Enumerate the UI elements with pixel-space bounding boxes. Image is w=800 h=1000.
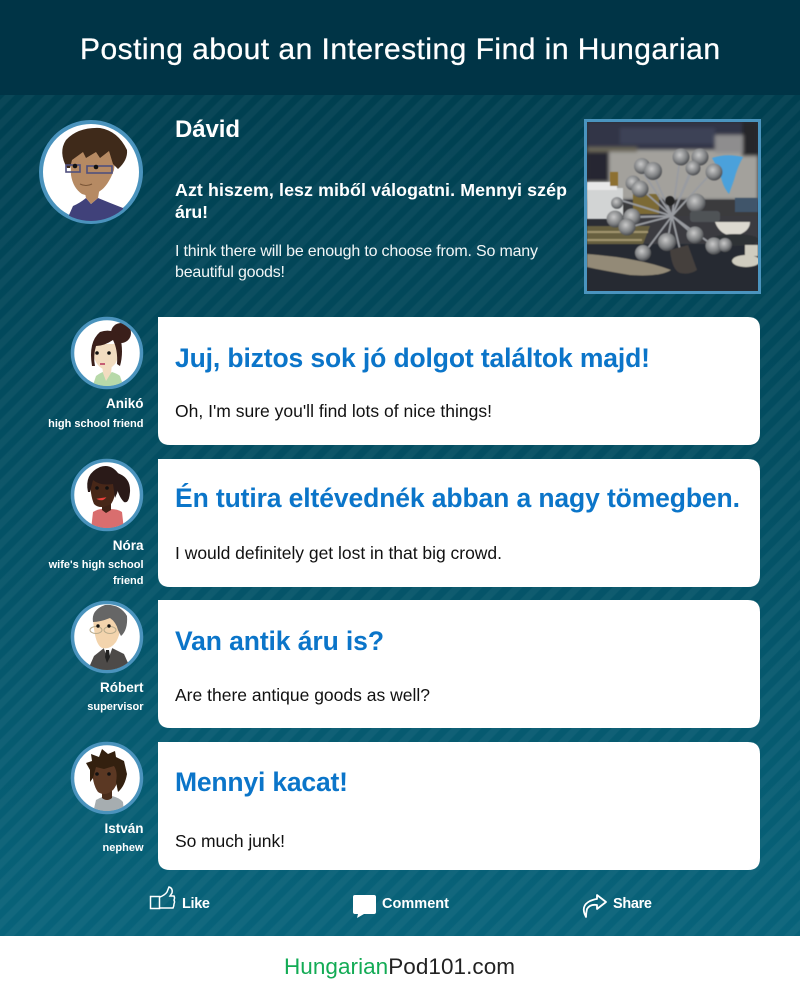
panel: István comment [72, 742, 760, 870]
title: Posting about an Interesting Find in Hungarian [80, 33, 720, 66]
poster translation [175, 243, 538, 281]
poster translation: I think there will be enough to choose from. So many [175, 243, 538, 260]
poster post in Hungarian: áru! [175, 202, 208, 222]
icon: speech bubble [353, 895, 376, 918]
comment in Hungarian: Van antik áru is? [175, 626, 384, 656]
header band [0, 0, 800, 95]
photo: flea market goods [586, 120, 760, 292]
blurred street background [587, 122, 758, 200]
comment translation: I would definitely get lost in that big crowd. [175, 543, 502, 563]
commenter name: Nóra [113, 538, 144, 553]
poster post in Hungarian: Azt hiszem, lesz miből válogatni. Mennyi szép [175, 180, 567, 200]
footer band [0, 936, 800, 1000]
commenter relation: friend [113, 575, 144, 587]
comment card [158, 600, 760, 728]
logo: HungarianPod101.com: HungarianPod101.com [284, 954, 515, 979]
label: Comment [382, 896, 449, 912]
poster name: Dávid [175, 116, 240, 143]
panel: Anikó comment [48, 317, 760, 445]
comment card [158, 317, 760, 445]
icon: share arrow [584, 895, 606, 917]
comment button [353, 895, 449, 918]
icon: thumbs up [150, 887, 174, 908]
commenter relation: wife's high school [48, 559, 144, 571]
comment translation: So much junk! [175, 831, 285, 851]
panel: Nóra comment [48, 459, 760, 587]
comment translation: Oh, I'm sure you'll find lots of nice things! [175, 401, 492, 421]
comment in Hungarian: Juj, biztos sok jó dolgot találtok majd! [175, 343, 650, 373]
poster post in Hungarian [175, 180, 567, 222]
commenter name: Róbert [100, 680, 144, 695]
commenter relation: high school friend [48, 418, 144, 430]
commenter name: István [104, 821, 144, 836]
comment in Hungarian: Én tutira eltévednék abban a nagy tömegben. [175, 483, 740, 513]
comment in Hungarian: Mennyi kacat! [175, 767, 348, 797]
avatar: Nóra [72, 460, 142, 530]
like button [150, 887, 210, 912]
comment card [158, 742, 760, 870]
avatar: István [72, 744, 142, 813]
commenter relation [48, 559, 144, 587]
comment translation: Are there antique goods as well? [175, 685, 430, 705]
poster translation: beautiful goods! [175, 264, 285, 281]
comment card [158, 459, 760, 587]
avatar: Róbert [72, 602, 142, 672]
commenter name: Anikó [106, 396, 144, 411]
avatar: Anikó [72, 318, 142, 388]
avatar: Dávid [41, 122, 141, 225]
label: Like [182, 896, 210, 912]
label: Share [613, 896, 652, 912]
share button [584, 895, 652, 917]
panel: Róbert comment [72, 600, 760, 728]
commenter relation: nephew [103, 842, 144, 854]
commenter relation: supervisor [87, 701, 144, 713]
